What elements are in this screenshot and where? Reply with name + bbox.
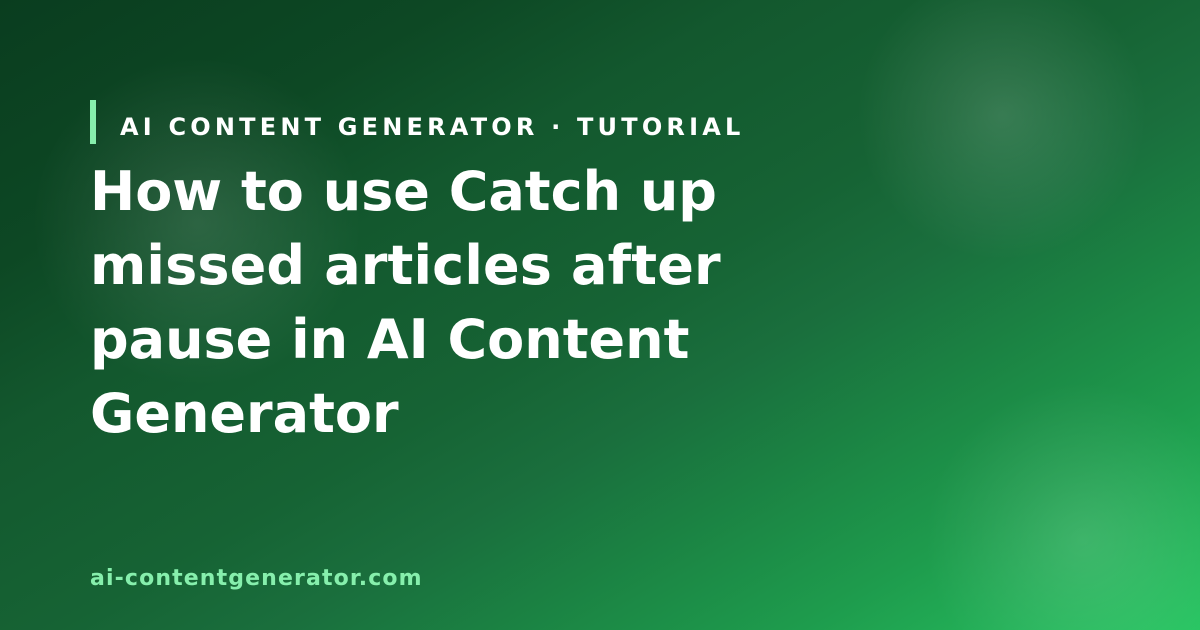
kicker: category label with accent bar [90,100,744,144]
title heading: Generator [90,382,399,445]
title heading: How to use Catch up [90,160,717,223]
title heading [90,160,721,445]
footer: site domain: ai-contentgenerator.com [90,566,423,591]
kicker: category label with accent bar: AI CONTENT GENERATOR · TUTORIAL [120,113,744,141]
title heading: missed articles after [90,234,721,297]
title heading: pause in AI Content [90,308,689,371]
